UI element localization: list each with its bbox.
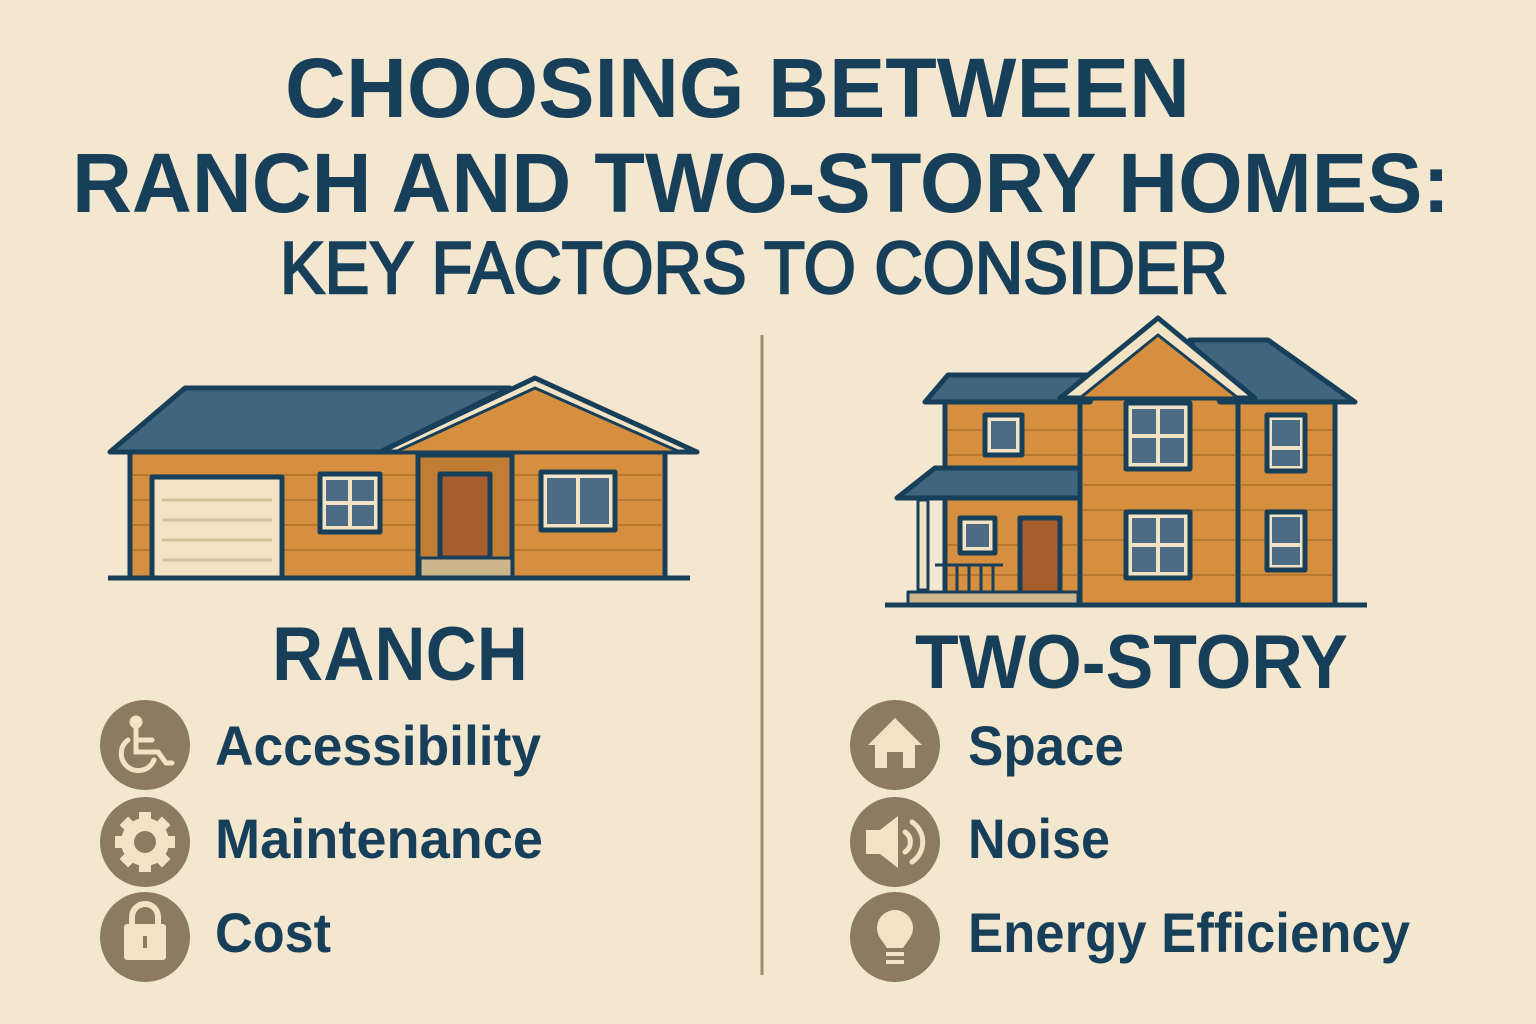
heading: two-story: TWO-STORY: [915, 620, 1348, 705]
illustration: ranch house: [108, 378, 697, 578]
list: two-story factors: [850, 700, 1410, 982]
icon: speaker: [850, 797, 940, 887]
list: ranch factors: Cost: [215, 901, 331, 964]
list: two-story factors: Space: [968, 714, 1124, 777]
list: ranch factors: Accessibility: [215, 714, 541, 777]
illustration: two-story house: [885, 318, 1367, 605]
icon: light bulb: [850, 892, 940, 982]
icon: wheelchair: [100, 700, 190, 790]
title: [72, 41, 1450, 230]
title: CHOOSING BETWEEN: [285, 41, 1190, 135]
list: two-story factors: Noise: [968, 807, 1110, 870]
icon: gear: [100, 797, 190, 887]
icon: house: [850, 700, 940, 790]
subtitle: KEY FACTORS TO CONSIDER: [280, 228, 1228, 309]
icon: padlock: [100, 892, 190, 982]
list: ranch factors: Maintenance: [215, 807, 543, 870]
list: ranch factors: [100, 700, 543, 982]
heading: ranch: RANCH: [272, 612, 528, 697]
list: two-story factors: Energy Efficiency: [968, 901, 1410, 964]
title: RANCH AND TWO-STORY HOMES:: [72, 136, 1450, 230]
